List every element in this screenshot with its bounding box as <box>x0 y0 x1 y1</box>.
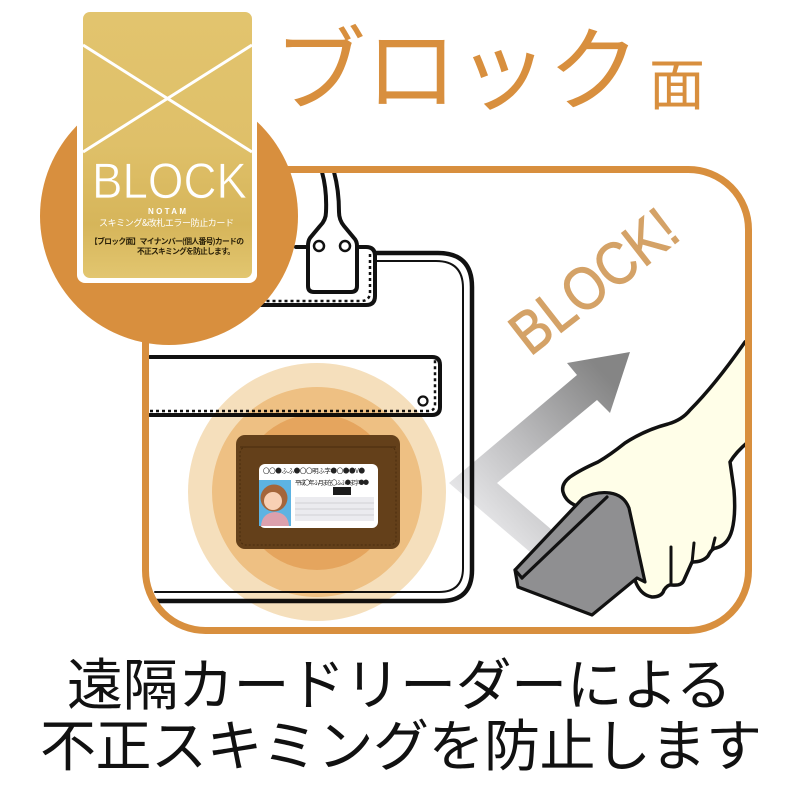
ID card: 〇〇●ふふ●〇〇明ふ字●〇●●V● <box>263 465 366 475</box>
text: BLOCK! rotated label: BLOCK! <box>497 195 691 367</box>
illustration: brown card holder with ID card <box>236 435 400 549</box>
title: ブロック面: ブロック <box>274 0 640 130</box>
card description: 【ブロック面】マイナンバー(個人番号)カードの <box>90 236 244 247</box>
text: bottom caption: 不正スキミングを防止します <box>40 702 762 783</box>
ID card <box>259 464 378 528</box>
card: gold BLOCK card <box>77 12 257 283</box>
card brand: NOTAM <box>148 207 186 216</box>
illustration: concentric signal circles <box>188 363 446 621</box>
illustration: block-side card held in hand <box>515 493 645 615</box>
card subtitle: スキミング&改札エラー防止カード <box>99 216 234 229</box>
text: bottom caption: 遠隔カードリーダーによる <box>67 641 732 722</box>
text: bottom caption <box>40 641 762 783</box>
icon: orange circle behind card <box>40 87 298 345</box>
illustration: hand <box>563 340 748 597</box>
title: ブロック面: 面 <box>649 41 705 122</box>
card wordmark: BLOCK <box>92 153 247 209</box>
panel: illustration frame background <box>146 170 748 630</box>
card description: 不正スキミングを防止します。 <box>137 246 235 257</box>
card description <box>90 236 244 257</box>
panel: illustration frame outline <box>146 170 748 630</box>
illustration: bag <box>150 172 472 601</box>
ID card: 平成〇年ふ月ま在 〇ふふ●ま字●● <box>295 478 369 487</box>
arrow: signal deflected by the block side <box>449 352 630 552</box>
